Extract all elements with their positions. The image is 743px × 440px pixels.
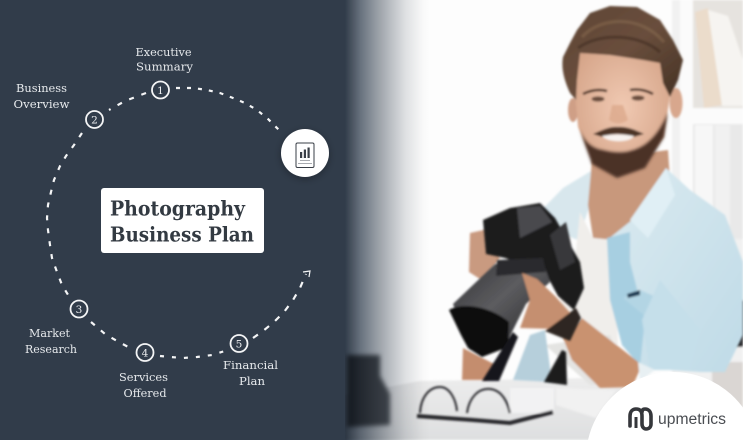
label: Market Research: Research — [25, 343, 77, 356]
left forearm — [462, 348, 498, 380]
label: Executive Summary — [136, 46, 194, 74]
glasses — [417, 387, 554, 423]
step 5 marker: 5 — [236, 338, 242, 350]
hair — [562, 6, 683, 100]
label: Business Overview — [14, 82, 70, 111]
camera — [449, 203, 584, 385]
step 1 marker — [152, 82, 169, 98]
logo corner: upmetrics: upmetrics — [658, 411, 726, 428]
title card: Photography — [110, 196, 246, 220]
label: Business Overview: Business — [16, 82, 67, 95]
label: Services Offered: Offered — [124, 387, 166, 400]
dashed circular path with arrow — [47, 88, 310, 358]
label: Services Offered: Services — [119, 371, 168, 384]
face and hair — [562, 6, 683, 178]
label: Market Research: Market — [29, 327, 71, 340]
label: Financial Plan: Financial — [223, 359, 279, 372]
step 4 marker: 4 — [142, 348, 149, 360]
label: Business Overview: Overview — [14, 98, 70, 111]
step 3 marker: 3 — [76, 304, 82, 316]
label: Executive Summary: Executive — [136, 46, 192, 59]
left hand — [469, 229, 500, 281]
step 2 marker: 2 — [91, 114, 98, 126]
logo corner: upmetrics — [588, 372, 743, 440]
label: Services Offered — [119, 371, 168, 400]
icon: report document in white circle — [281, 129, 329, 177]
under-arm shirt — [513, 330, 552, 382]
label: Financial Plan: Plan — [239, 375, 265, 388]
papers on table — [556, 388, 616, 418]
label: Executive Summary: Summary — [136, 60, 194, 74]
step 4 marker — [136, 344, 154, 361]
nose — [609, 105, 628, 124]
background bookshelf — [672, 0, 743, 440]
arrow head — [303, 271, 310, 277]
forearm right — [563, 318, 642, 388]
strap — [482, 332, 518, 381]
dark panel with gradient edge — [0, 0, 430, 440]
title card — [101, 188, 264, 253]
right hand — [520, 273, 572, 329]
watch — [545, 308, 581, 341]
step 5 marker — [230, 335, 248, 352]
t-shirt — [560, 212, 618, 345]
photo: photographer at desk — [345, 0, 743, 440]
blurred jar — [347, 355, 390, 427]
denim shirt right — [607, 168, 743, 372]
label: Financial Plan — [223, 359, 279, 388]
denim shirt left shoulder — [530, 168, 596, 240]
lens hood opening — [449, 306, 509, 357]
step 2 marker — [86, 111, 103, 128]
step 1 marker: 1 — [157, 85, 164, 97]
step 3 marker — [70, 300, 88, 318]
brows and eyes — [583, 90, 653, 94]
label: Market Research — [25, 327, 77, 356]
person — [462, 150, 743, 388]
lens barrel — [453, 262, 550, 350]
neck — [588, 150, 670, 240]
title card: Business Plan — [110, 222, 254, 246]
beard — [579, 112, 668, 178]
table — [345, 378, 625, 440]
